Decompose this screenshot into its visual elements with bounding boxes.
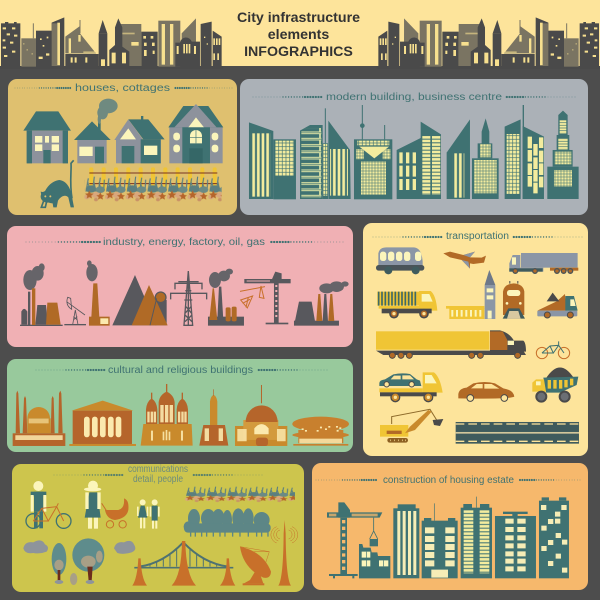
buildings [13,384,349,446]
panel: industry [7,226,353,347]
office towers [300,105,579,199]
panel: houses, cottages [8,79,237,215]
left skyline [0,17,223,69]
heading dots [253,96,575,98]
heading dots [316,479,580,481]
vehicles [376,247,579,444]
heading: modern building: modern building, business centre [326,92,503,103]
panel: communications, people [12,464,304,592]
industry icons [20,260,349,326]
heading dots [26,241,343,243]
header band [0,0,600,66]
heading: cultural: cultural and religious buildings [108,365,253,376]
heading: communications [128,464,188,485]
panel: modern buildings [240,79,588,215]
icon: cat [41,160,74,207]
heading: construction: construction of housing estate [383,475,514,486]
office tower 1 [249,122,296,199]
heading dots [373,236,582,238]
heading: communications: detail, people [133,474,183,485]
heading dots [54,474,262,476]
heading: communications: communications [128,464,188,475]
title: INFOGRAPHICS [244,44,353,60]
houses [23,99,223,163]
people, trees and structures [23,481,298,586]
title [237,10,360,60]
panel: cultural and religious [7,359,353,452]
right skyline [377,17,600,69]
title: City infrastructure [237,10,360,26]
heading: transportation: transportation [446,231,509,242]
heading: houses: houses, cottages [75,83,170,94]
heading: industry: industry, energy, factory, oil, gas [103,237,265,248]
crane and towers [327,497,569,578]
panel: construction of housing estate [312,463,588,590]
fence and flowers [84,167,222,203]
title: elements [268,27,329,43]
heading dots [36,369,327,371]
panel: transportation [363,223,588,456]
heading dots [15,87,232,89]
